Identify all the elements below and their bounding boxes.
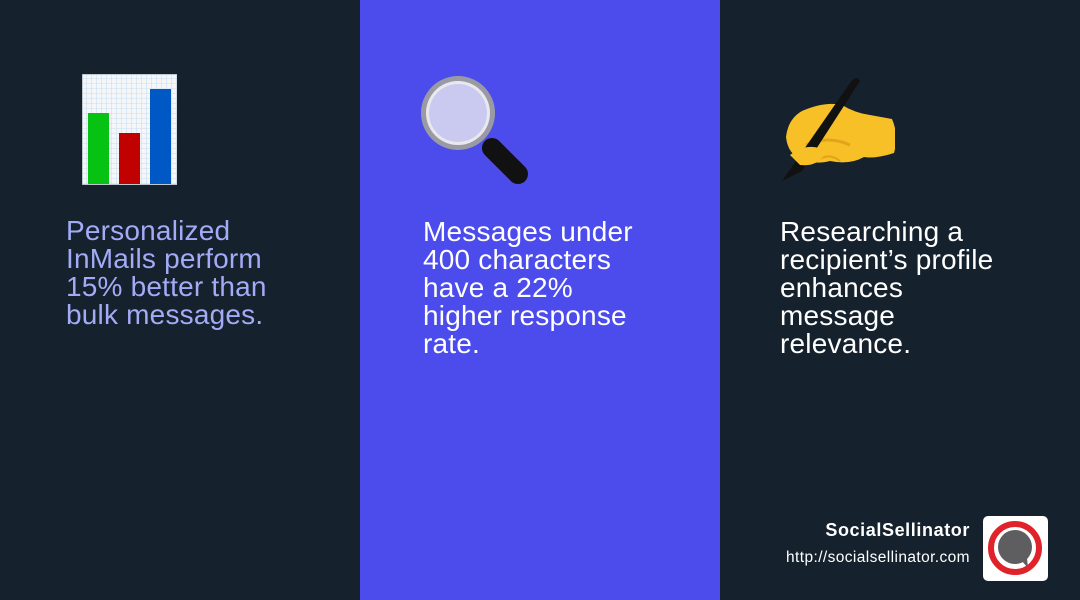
panel: left [0,0,360,600]
footer: brand: http://socialsellinator.com [786,549,970,566]
text: researching: enhances [780,272,903,303]
text: messages: higher response [423,300,627,331]
panel: middle [360,0,720,600]
text: messages: Messages under [423,216,633,247]
text: personalized: 15% better than [66,271,267,302]
logo [983,516,1048,581]
text: researching [780,216,993,359]
icon: bar chart [82,74,177,185]
text: personalized: Personalized [66,215,230,246]
text: messages [423,216,633,359]
footer: brand [786,520,970,566]
icon: writing hand [782,78,895,181]
text: researching: message [780,300,895,331]
text: messages: 400 characters [423,244,611,275]
text: personalized [66,215,267,330]
text: messages: rate. [423,328,480,359]
text: researching: Researching a [780,216,963,247]
text: personalized: InMails perform [66,243,262,274]
text: researching: relevance. [780,328,911,359]
text: messages: have a 22% [423,272,573,303]
icon: magnifying glass [421,76,528,184]
text: personalized: bulk messages. [66,299,263,330]
footer: brand: SocialSellinator [825,520,970,540]
text: researching: recipient’s profile [780,244,993,275]
panel: right [720,0,1080,600]
